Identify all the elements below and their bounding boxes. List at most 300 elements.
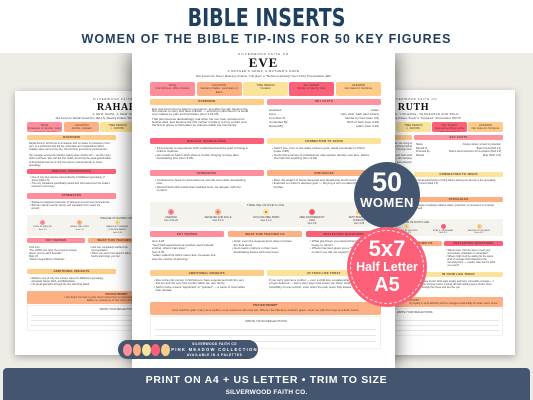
- write heading: WRITE YOUR REFLECTIONS:: [99, 308, 136, 311]
- Ruth key event card: KEY EVENT: [442, 123, 457, 127]
- additional insights bullets: than despair.: [156, 288, 172, 292]
- what this teaches header: [228, 231, 302, 237]
- what this teaches bullets: [232, 239, 292, 254]
- Rahab teaches text: family and brings you into: [91, 255, 120, 258]
- also known as: Also Known As: None | Meaning of Name: "Life-giver" or "Mother of all living" (Gen 3:20) | Pronunciation: EEV: [196, 74, 331, 78]
- timeline dot 5: [477, 224, 482, 229]
- Rahab timeline: [27, 215, 206, 236]
- card: location: Garden of Eden, Land East of: [200, 86, 238, 90]
- Rahab overview text: own, in a profession that left her vulnerable and marginalized. When: [29, 145, 104, 148]
- Rahab key verses text: Josh 2:11: [29, 246, 40, 249]
- fact labels: Sons:: [269, 112, 277, 116]
- fact values: Birth of Seth (Gen 4:25): [347, 120, 379, 124]
- banner brand: SILVERWOOD FAITH CO.: [226, 389, 307, 396]
- key verses text: Gen 3:20: [152, 250, 164, 254]
- Ruth reflection text: • Where might God be asking for the same: [446, 255, 493, 258]
- what this teaches header: WHAT THIS TEACHES US: [245, 232, 285, 236]
- timeline label: deceived: Gen 3:1-6: [212, 219, 224, 222]
- Ruth connection header: [414, 172, 503, 177]
- write heading: WRITE YOUR REFLECTIONS:: [397, 311, 433, 314]
- Rahab overview text: didn't end there. She married into Judah, becoming the great-grandmother: [29, 157, 111, 160]
- reflection questions bullets: [310, 239, 367, 254]
- fact labels: Married: [416, 154, 424, 156]
- Rahab biblical significance header: BIBLICAL SIGNIFICANCE: [52, 169, 91, 173]
- Rahab role card: [27, 122, 62, 132]
- timeline dot: Seth born: [356, 209, 362, 215]
- Rahab key verses header: [27, 238, 85, 243]
- size 5x7: 5x7: [369, 236, 405, 260]
- reflection questions bullets: comfort you did not expect?: [312, 250, 349, 254]
- reflection questions bullets: heavy to name?: [312, 242, 333, 246]
- biblical significance bullets: [155, 146, 248, 160]
- card: lifespan: Not stated in Scripture: [345, 86, 372, 90]
- timeline label 2: Josh 2:4: [75, 229, 84, 231]
- overview text: brother Abel. Eve became the first mother in history to bury a child, and: [152, 120, 246, 124]
- fact values: [340, 108, 379, 128]
- Ruth struggles text: land.: [417, 207, 423, 210]
- Rahab teaches text: • When you serve from doesn't affect: [90, 252, 131, 255]
- Rahab teaches text: [90, 246, 131, 258]
- timeline dot: created: [168, 209, 174, 215]
- card: lifespan: LIFESPAN: [352, 83, 365, 87]
- badge number: 50: [372, 167, 402, 197]
- panel: left page Rahab: [15, 91, 218, 355]
- timeline label 1: Josh 2:1: [38, 229, 47, 231]
- fact values: Foreign widow, no land or protection: [463, 143, 501, 146]
- Ruth key event card: Approaches Boaz at the: [435, 126, 464, 130]
- strengths bullets: [155, 178, 246, 192]
- strengths header: [150, 170, 264, 176]
- reflection questions header: [306, 231, 381, 237]
- write reflections area: [150, 316, 381, 349]
- Ruth key facts header: [414, 135, 503, 140]
- card: key event: KEY EVENT: [304, 83, 319, 87]
- Ruth overview header: [324, 135, 412, 140]
- fact values: Boaz's Field (Ruth 2:3): [477, 146, 501, 150]
- Rahab tagline: A NEW NAME, A NEW STORY: [93, 112, 140, 116]
- Rahab additional insights header: ADDITIONAL INSIGHTS: [53, 269, 90, 273]
- connection to Jesus bullets: • Seth's line, born in the wake of Eve's grief, leads eventually to Christ: [272, 146, 365, 150]
- Rahab biblical significance header: [27, 169, 116, 174]
- card: location: LOCATION: [212, 83, 226, 87]
- in your life today header: IN YOUR LIFE TODAY: [307, 271, 341, 275]
- timeline dot: Abel murdered: [309, 209, 315, 215]
- strengths bullets: loss.: [157, 181, 163, 185]
- Rahab time period card: c. 1400 BC: [111, 126, 124, 130]
- card: role: First Woman, Wife of Adam: [156, 86, 190, 90]
- biblical significance bullets: • Her words at Seth's birth show a mother clinging to hope after: [155, 153, 239, 157]
- Rahab significance bullets: [30, 176, 110, 188]
- card: role: ROLE: [169, 83, 176, 87]
- fact labels: Protected By: [416, 150, 430, 153]
- Rahab location card: Jericho, Canaan: [71, 126, 92, 130]
- additional insights bullets: [154, 278, 245, 292]
- timeline label: Seth: SETH BORN AS A: [349, 216, 369, 219]
- Ruth overview text: drew Boaz's attention, who became: [373, 157, 412, 160]
- timeline label: Cain and Abel: CAIN AND ABEL BORN: [253, 216, 279, 219]
- timeline label 4: BOAZ'S THRESHING: [433, 230, 453, 232]
- Ruth reflection text: kind of courage Ruth showed at the: [447, 258, 487, 261]
- Ruth in your life today header: [414, 272, 503, 277]
- Ruth overview text: [368, 142, 412, 164]
- timeline label: deceived: [204, 216, 232, 222]
- Ruth time period card: TIME PERIOD: [404, 123, 423, 127]
- palette swatch peach: [132, 344, 140, 356]
- timeline heading: TIMELINE OF EVE'S LIFE: [247, 203, 284, 207]
- in your life today text: possibility of new comfort, even when the pain never fully leaves.: [269, 285, 352, 289]
- strengths bullets: • Continued to hope for and welcome new life even after devastating: [155, 178, 246, 182]
- key verses header: [150, 231, 224, 237]
- Rahab insights bullets: • Rahab is one of only four women named in Matthew's genealogy,: [30, 277, 104, 280]
- Ruth teaches text: requires the: [396, 249, 409, 252]
- biblical significance bullets: child to violence.: [157, 149, 179, 153]
- strengths header: STRENGTHS: [197, 171, 217, 175]
- Rahab overview header: OVERVIEW: [63, 135, 80, 139]
- key verses text: of Abel, whom Cain slew.": [152, 246, 186, 250]
- Rahab insights bullets: • Her great-grandson through the line was King David.: [30, 283, 90, 286]
- timeline label 2: HIDES THE SPIES: [70, 226, 89, 228]
- card: time period: TIME PERIOD: [256, 83, 275, 87]
- fact labels: [416, 143, 430, 156]
- timeline label 5: [468, 230, 490, 234]
- timeline label: created: [164, 216, 178, 222]
- panel: right page Ruth: [312, 90, 515, 355]
- connection to Jesus bullets: (Luke 3:38).: [274, 149, 290, 153]
- Rahab strengths bullets: • Showed courageous protection of strangers at enormous personal risk.: [30, 201, 110, 204]
- timeline label: Abel murdered: CAIN: [309, 219, 315, 222]
- overview text: [152, 106, 248, 127]
- timeline label 3: FOR HER FAMILY: [108, 229, 127, 231]
- Rahab strengths bullets: [30, 201, 110, 210]
- additional insights header: ADDITIONAL INSIGHTS: [189, 271, 225, 275]
- key facts table: [269, 108, 379, 128]
- timeline label: Seth: COMFORT: [353, 219, 365, 222]
- Rahab significance bullets: Jesus (Matt 1:5).: [31, 179, 50, 182]
- in your life today text: If you carry grief as a mother — over a child lost, a relationship broken, or: [269, 278, 363, 282]
- timeline label 3: Ruth 2:3: [403, 232, 411, 234]
- prayer text: define me, remind me of Your mercy and every stone.: [87, 299, 146, 302]
- palette swatch red: [151, 344, 160, 356]
- timeline label 1: LIVES IN JERICHO: [33, 226, 52, 228]
- Ruth in your life text: was through the house and see the you: [416, 286, 460, 289]
- timeline label 4: [433, 230, 453, 234]
- Rahab name: RAHAB: [97, 102, 136, 113]
- struggles header: [267, 170, 381, 176]
- Ruth struggles text: [416, 204, 494, 210]
- timeline heading: TIMELINE OF RUTH'S LIFE: [398, 220, 429, 224]
- key verses text: Gen 4:25: [152, 239, 164, 243]
- Ruth struggles text: • Began completely without status, protection, or resources in a foreign: [416, 204, 494, 207]
- connection to Jesus bullets: she had lost anything (Gen 3:15).: [274, 156, 318, 160]
- bottom banner: [3, 368, 530, 400]
- fact values: Cain, Abel, Seth (and others): [340, 112, 379, 116]
- Rahab additional insights header: [27, 269, 116, 274]
- Rahab significance bullets: covenant community.: [31, 185, 55, 188]
- Ruth time period card: [396, 122, 431, 132]
- Ruth in your life today header: IN YOUR LIFE TODAY: [442, 272, 475, 276]
- palette swatch yellow: [142, 344, 150, 356]
- prayer text: my loyalty or work faithfully and the courage to ask boldly for what I need. Amen.: [409, 302, 498, 305]
- key verses header: KEY VERSES: [177, 232, 197, 236]
- timeline label: created: CREATED: [165, 216, 177, 219]
- Rahab teaches text: • God can completely rewrite a life: [90, 246, 128, 249]
- card: key event: [289, 82, 334, 96]
- Rahab key verses text: "The LORD your God, He is God in heaven: [29, 249, 77, 252]
- collection pill: [118, 340, 258, 359]
- timeline dot 4: [441, 224, 446, 229]
- timeline dot 2: [77, 220, 82, 225]
- Rahab brand line: SILVERWOOD FAITH CO: [93, 97, 140, 101]
- prayer heading: PRAYER PROMPT: [105, 292, 128, 296]
- Ruth reflection text: somewhere unfamiliar or vulnerable?: [447, 252, 488, 255]
- Ruth brand line: SILVERWOOD FAITH CO: [390, 97, 437, 101]
- what this teaches bullets: devastating losses with new hope.: [234, 250, 279, 254]
- overview header: OVERVIEW: [198, 99, 215, 103]
- subtitle: WOMEN OF THE BIBLE TIP-INS FOR 50 KEY FIGURES: [82, 32, 451, 46]
- Rahab key verses text: Matt 1:5: [29, 255, 38, 258]
- timeline panel: [150, 202, 381, 227]
- Ruth overview text: Naomi and left everything behind: [375, 145, 412, 148]
- timeline dot: Cain and Abel born: [263, 209, 269, 215]
- Ruth overview text: her husband died in Moab, she clung to: [368, 142, 412, 145]
- Ruth overview text: Her quiet loyalty and hard work: [378, 154, 412, 157]
- title: BIBLE INSERTS: [188, 3, 345, 32]
- card: lifespan: [336, 82, 381, 96]
- prayer prompt: [150, 302, 381, 314]
- Rahab strengths header: STRENGTHS: [62, 193, 81, 197]
- Rahab significance bullets: • One of only four women named directly in Matthew's genealogy of: [30, 176, 105, 179]
- Rahab strengths header: [27, 193, 116, 198]
- Rahab overview text: [29, 142, 112, 167]
- Ruth key facts table: [416, 143, 501, 156]
- Ruth teaches text: bearing: [396, 252, 404, 255]
- card: time period: [243, 82, 288, 96]
- Ruth in your life text: want you to know God is moving still with nothing spent. Ruth's story: [416, 283, 492, 286]
- fact labels: Husband:: [269, 108, 282, 112]
- timeline label 1: [33, 226, 52, 231]
- Ruth overview header: OVERVIEW: [359, 135, 377, 139]
- timeline label 2: [70, 226, 89, 231]
- connection to Jesus header: [267, 138, 381, 144]
- key verses text: "Adam called his wife's name Eve; because she: [152, 253, 216, 257]
- badge: sizes: [347, 227, 427, 307]
- what this teaches bullets: the final word.: [234, 242, 252, 246]
- Ruth teaches text: grace: [396, 258, 402, 261]
- fact labels: [269, 108, 288, 128]
- Rahab key verses header: KEY VERSES: [46, 238, 66, 242]
- Ruth reflection questions header: [444, 241, 503, 246]
- biblical significance header: BIBLICAL SIGNIFICANCE: [187, 139, 226, 143]
- struggles bullets: brother.: [274, 185, 284, 189]
- prayer text: [409, 298, 498, 305]
- connection to Jesus bullets: [272, 146, 370, 160]
- badge word: WOMEN: [360, 195, 414, 210]
- fact values: Boaz (Ruth 4:13): [483, 154, 501, 156]
- additional insights bullets: • Eve is the only person in Scripture to have experienced both the very: [154, 278, 244, 282]
- Ruth connection text: • Great-grandmother of King David, placing her directly in the genealogy: [416, 179, 496, 182]
- Ruth reflection text: threshing floor — a quiet, wise risk for what: [447, 261, 495, 264]
- prayer text: Lord, hold the grief I carry as a mother, or as someone who has lost. Where I feel like Eve at Abel's grave, meet me with the hope of a Seth. Amen.: [172, 308, 359, 312]
- write heading: WRITE YOUR REFLECTIONS:: [245, 318, 288, 322]
- palette swatch pink: [123, 344, 132, 356]
- Ruth in your life text: [416, 280, 494, 289]
- Rahab prayer prompt: [27, 291, 206, 304]
- Rahab overview header: [27, 135, 116, 140]
- overview text: the first to grieve a child taken by violence within her own family.: [152, 123, 237, 127]
- Rahab write reflections area: [27, 305, 206, 331]
- overview header: [150, 99, 264, 104]
- Rahab strengths bullets: ground.: [31, 207, 40, 210]
- Ruth name: RUTH: [398, 102, 429, 113]
- Rahab location card: LOCATION: [74, 123, 89, 127]
- timeline dot 3: [404, 224, 409, 229]
- card: key event: Murder of Abel by Cain: [297, 86, 326, 90]
- Rahab insights bullets: [30, 277, 104, 286]
- overview text: first woman to carry and bear children — entering motherhood in a world: [152, 109, 248, 113]
- Rahab key verses text: "Salmon begot Boaz of Rachab.": [29, 258, 65, 261]
- struggles header: STRUGGLES: [314, 171, 334, 175]
- Rahab insights bullets: alongside Tamar, Ruth, and Bathsheba.: [31, 280, 75, 283]
- what this teaches bullets: • God meets mothers in their most: [232, 246, 277, 250]
- Ruth key event card: [432, 122, 467, 132]
- fact values: Murder by Cain (Gen 4:8): [345, 116, 379, 120]
- pill brand: SILVERWOOD FAITH CO: [192, 342, 237, 346]
- reflection questions bullets: • Where has God given you a "Seth" —: [310, 246, 362, 250]
- pill palettes note: AVAILABLE IN 4 PALETTES: [187, 353, 242, 357]
- Rahab role card: ROLE: [41, 123, 48, 127]
- struggles bullets: • Bore the weight of being deceived and disobeying God's word.: [272, 178, 357, 182]
- in your life today text: a hope deferred — Eve's story says God meets you there. Hold the: [269, 281, 355, 285]
- Rahab overview text: genealogy.: [29, 164, 41, 167]
- fact values: Adam (Gen 3:20): [356, 124, 379, 128]
- Rahab location card: [64, 122, 99, 132]
- key verses text: "God hath appointed me another seed instead: [152, 242, 213, 246]
- struggles bullets: • Endured a mother's deepest grief — burying a son murdered by his: [272, 181, 363, 185]
- card: location: Eden: [216, 90, 222, 94]
- timeline label: Seth: [348, 216, 369, 225]
- palette swatch orange: [161, 344, 170, 356]
- Rahab key verses text: above, and on earth beneath.": [29, 252, 63, 255]
- Ruth what teaches header: [384, 241, 442, 246]
- strengths bullets: • Named Seth with words that credited God, not despair, with her: [155, 185, 241, 189]
- Ruth overview text: for a foreign land.: [393, 148, 412, 151]
- badge: 50 women: [354, 162, 420, 228]
- timeline dot: deceived: [215, 209, 221, 215]
- additional insights bullets: • Seth's name means "appointed" or "granted" — a name of trust rather: [154, 285, 245, 289]
- Ruth reflection text: [446, 249, 496, 267]
- Rahab overview text: Israelite spies came to the city, she hid them at immense personal risk.: [29, 148, 107, 151]
- Rahab teaches text: and reputation.: [91, 249, 108, 252]
- overview text: That pain became devastatingly real when her son Cain murdered his: [152, 117, 244, 121]
- Rahab overview text: of King David and one of only four women named directly in Jesus': [29, 161, 103, 164]
- Ruth lifespan card: [468, 122, 503, 132]
- timeline label: Abel murdered: [299, 216, 325, 225]
- reflection questions header: REFLECTION QUESTIONS: [323, 232, 364, 236]
- reflection questions bullets: • What grief have you carried that feels too: [310, 239, 367, 243]
- card: location: [196, 82, 242, 96]
- prayer text: [64, 296, 168, 302]
- what this teaches bullets: • Grief, even the deepest kind, does not have: [232, 239, 292, 243]
- timeline label 3: [106, 226, 129, 234]
- Rahab role card: Innkeeper of Jericho; Later: [28, 126, 61, 130]
- key verses text: [152, 239, 216, 260]
- timeline label: Seth: Gen 4:25: [354, 222, 364, 225]
- Eve name: EVE: [249, 55, 278, 70]
- Ruth struggles header: [414, 197, 503, 202]
- Rahab what this teaches header: [88, 238, 146, 243]
- fact labels: Comforted By:: [269, 120, 288, 124]
- in your life today text: [269, 279, 363, 289]
- timeline label 3: [396, 230, 418, 234]
- additional insights header: [150, 270, 264, 276]
- struggles bullets: [272, 178, 363, 189]
- Ruth time period card: c. 1100 BC: [407, 126, 420, 130]
- overview text: now marked by pain and hard labor (Gen 3:16,20).: [152, 112, 219, 116]
- Ruth prayer prompt: [324, 297, 503, 307]
- prayer text: Lord, thank You that my past doesn't determine my belonging. Where shame and stigma try to: [65, 296, 168, 299]
- key verses text: was the mother of all living.": [152, 256, 189, 260]
- fact labels: Named By:: [269, 124, 284, 128]
- timeline label: deceived: DECEIVED AND FALLS: [205, 216, 231, 219]
- Ruth key facts header: KEY FACTS: [450, 135, 467, 139]
- key facts header: KEY FACTS: [315, 99, 333, 103]
- size half letter: Half Letter: [356, 260, 418, 274]
- Ruth teaches text: [396, 249, 409, 261]
- Ruth reflection questions header: REFLECTION QUESTIONS: [453, 241, 494, 245]
- Rahab key verses text: [29, 246, 77, 261]
- fact values: Boaz's direct instruction to his workers (Ruth 2:9): [449, 150, 501, 153]
- Rahab significance bullets: • The only Canaanite specifically named and hold welcomed into Israel's: [30, 182, 110, 185]
- Ruth connection text: [416, 179, 496, 185]
- timeline label: created: Gen 2:21-22: [164, 219, 178, 222]
- timeline dot 3: [115, 220, 120, 225]
- Ruth also known as: Also Known As: — | Meaning of Name: "Friend" or "Companion" | Pronunciation: ROOTH: [366, 117, 461, 120]
- timeline label: Cain and Abel: Gen 4:1-2: [260, 219, 272, 222]
- timeline label 3: GLEANS IN THE FIELD: [396, 230, 418, 232]
- card: role: [150, 82, 195, 96]
- panel: center page Eve: [132, 53, 395, 368]
- prayer heading: PRAYER PROMPT: [253, 303, 278, 307]
- connection to Jesus bullets: • God's first promise of a Redeemer was spoken directly over Eve, before: [272, 153, 369, 157]
- fact values: [449, 143, 501, 156]
- timeline label 4: Ruth 3:9: [439, 232, 447, 234]
- connection to Jesus header: CONNECTION TO JESUS: [305, 139, 343, 143]
- Rahab also known as: Also Known As: Rachab (Greek form, Matt 1:5) | Meaning of Name: "Broad" or "Spacious" | Pronunciation: RAY-hab: [55, 117, 178, 120]
- dashed ring: [350, 230, 424, 304]
- fact labels: Status: [416, 143, 423, 146]
- Ruth tagline: A WIDOW'S LOSS, VIOLENCE, VENGEANCE AND BOLD: [368, 112, 459, 116]
- Rahab time period card: TIME PERIOD: [108, 123, 127, 127]
- Ruth struggles header: STRUGGLES: [449, 197, 468, 201]
- Ruth teaches text: loneliness: [396, 255, 407, 258]
- timeline label 5: ANCESTOR OF DAVID: [468, 230, 490, 232]
- Ruth connection header: CONNECTION TO JESUS: [439, 172, 478, 176]
- timeline label: Cain and Abel: [252, 216, 280, 222]
- tagline: A MOTHER'S GRIEF, A MOTHER'S HOPE: [228, 68, 299, 72]
- biblical significance bullets: devastating loss (Gen 4:25).: [157, 156, 194, 160]
- Ruth reflection text: • Where have I felt the way to meet your: [446, 249, 490, 252]
- Ruth overview text: her redeemer and protector.: [381, 161, 412, 164]
- Rahab strengths bullets: • Built an entirely new life, family, and reputation from nearly the: [30, 204, 100, 207]
- strengths bullets: comfort.: [157, 188, 168, 192]
- fact values: Adam: [371, 108, 379, 112]
- prayer text: PROMPT: [409, 298, 420, 302]
- timeline label: Abel murdered: Gen 4:8: [308, 222, 316, 225]
- Rahab what this teaches header: WHAT THIS TEACHES US: [97, 238, 137, 242]
- Ruth lifespan card: LIFESPAN: [479, 123, 492, 127]
- banner main text: PRINT ON A4 + US LETTER • TRIM TO SIZE: [146, 374, 387, 386]
- Ruth in your life text: If you have known what quiet loyalty and hard, vulnerable courage — I: [416, 280, 494, 283]
